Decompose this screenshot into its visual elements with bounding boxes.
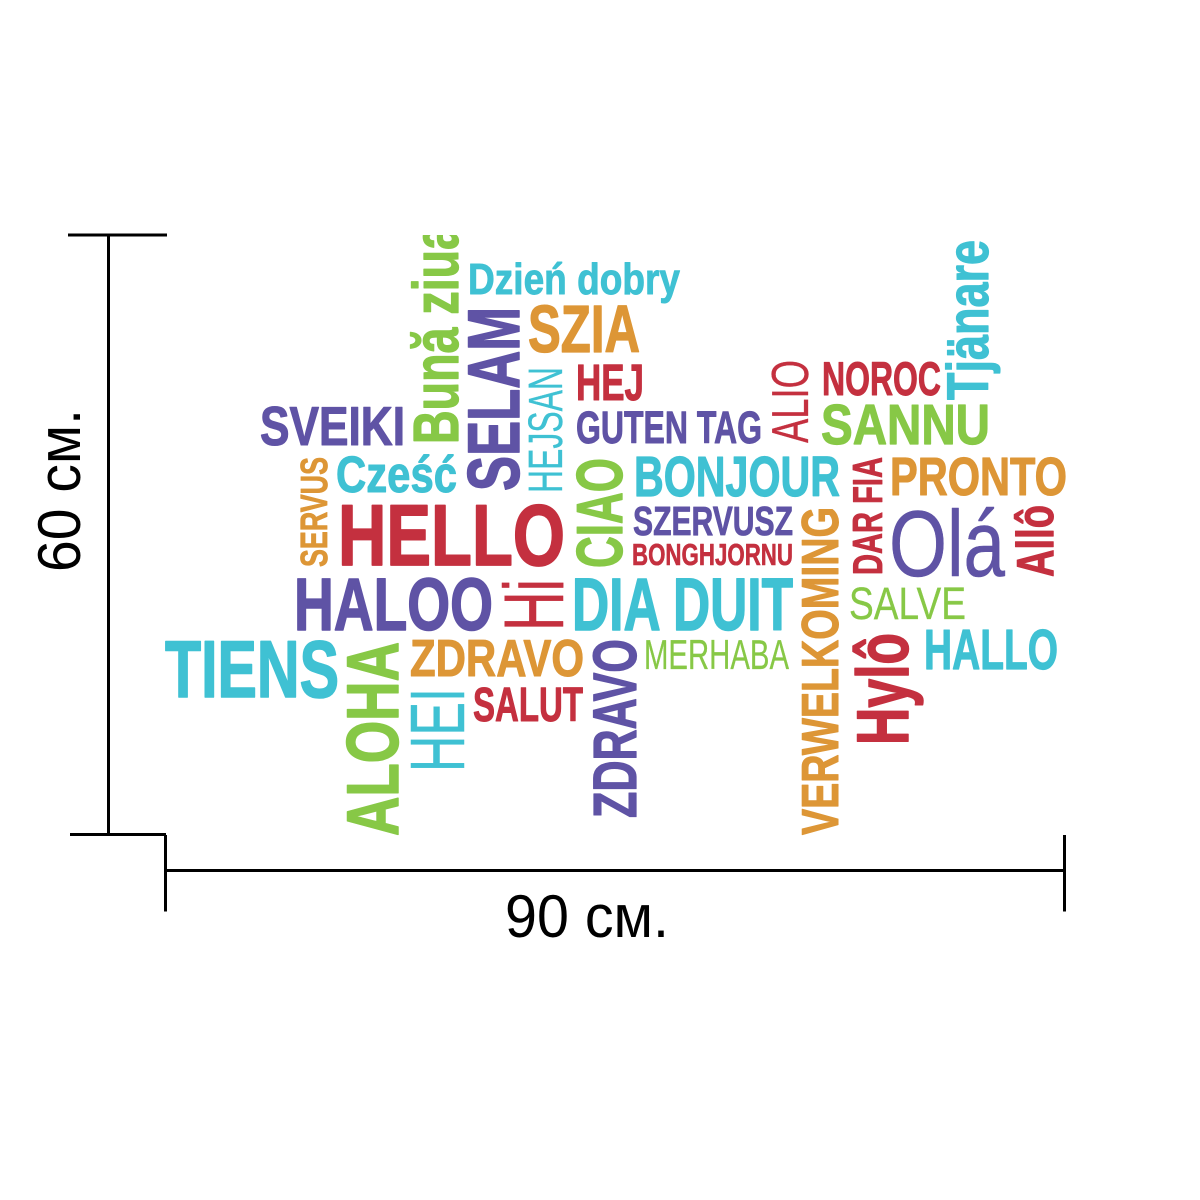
word: SALVE: SALVE — [849, 578, 966, 629]
word: Hylo: Hylô — [843, 633, 924, 745]
word: DAR FIA: DAR FIA — [844, 457, 891, 575]
word: Dzien dobry: Dzień dobry — [468, 255, 680, 304]
word: BONGHJORNU: BONGHJORNU — [632, 537, 793, 572]
word: ZDRAVO horizontal: ZDRAVO — [410, 630, 584, 688]
word: Czesc: Cześć — [336, 446, 457, 503]
width label: 90 см. — [505, 883, 669, 950]
word: SZERVUSZ: SZERVUSZ — [633, 498, 793, 544]
word: Tjanare: Tjänare — [936, 240, 1001, 400]
word: Buna ziua: Bună ziua — [400, 224, 472, 444]
word: HALLO: HALLO — [924, 618, 1058, 682]
word: DIA DUIT: DIA DUIT — [572, 563, 793, 646]
height dimension line — [68, 235, 167, 834]
word: GUTEN TAG: GUTEN TAG — [576, 402, 762, 453]
word: VERWELKOMING: VERWELKOMING — [792, 507, 850, 835]
word: Ola: Olá — [889, 491, 1006, 596]
word: ALOHA: ALOHA — [333, 642, 414, 836]
word: NOROC: NOROC — [822, 352, 941, 405]
word: PRONTO: PRONTO — [890, 447, 1067, 507]
word: HELLO: HELLO — [338, 488, 565, 584]
word cloud — [165, 224, 1067, 836]
word: Allo: Allô — [1007, 505, 1065, 577]
word: MERHABA: MERHABA — [644, 631, 789, 678]
word: Hi: Hi — [487, 579, 581, 631]
word: SERVUS: SERVUS — [294, 457, 336, 567]
word: SANNU: SANNU — [821, 393, 990, 457]
word: HEJ: HEJ — [576, 354, 644, 411]
word: SZIA: SZIA — [528, 292, 640, 367]
word: HEJSAN: HEJSAN — [520, 367, 573, 493]
word: TIENS: TIENS — [165, 625, 339, 715]
word: HEI: HEI — [395, 688, 481, 772]
word: HALOO: HALOO — [294, 563, 493, 646]
word: ZDRAVO vertical: ZDRAVO — [581, 639, 649, 818]
word: ALIO: ALIO — [762, 360, 820, 443]
word: SELAM: SELAM — [454, 307, 535, 491]
word: SALUT: SALUT — [473, 679, 583, 732]
word: BONJOUR: BONJOUR — [634, 445, 840, 509]
width dimension line — [166, 835, 1064, 912]
word: SVEIKI: SVEIKI — [260, 395, 405, 457]
word: CIAO: CIAO — [563, 458, 636, 568]
height label: 60 см. — [26, 409, 93, 572]
